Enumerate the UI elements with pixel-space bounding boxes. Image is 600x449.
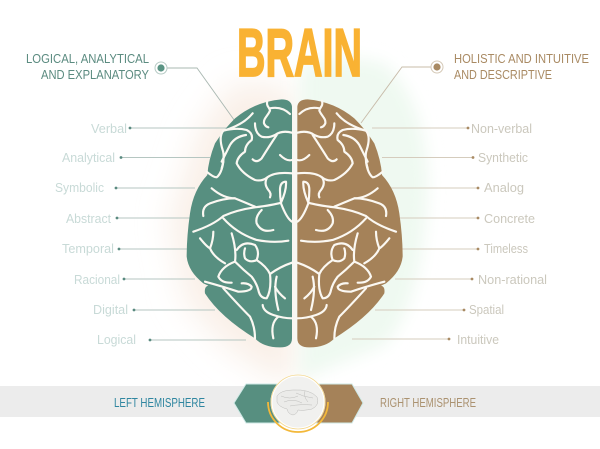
right attribute labels: Non-verbal — [471, 122, 532, 136]
bottom band — [0, 386, 600, 417]
watercolor background: right — [300, 58, 428, 380]
left attribute labels: Abstract — [66, 212, 112, 226]
right heading: AND DESCRIPTIVE — [454, 68, 552, 82]
left attribute labels: Verbal — [91, 122, 127, 136]
left attribute leader lines — [115, 127, 246, 341]
left heading — [26, 52, 150, 82]
right attribute leader lines — [352, 127, 479, 340]
right hemisphere — [297, 99, 403, 347]
icon: small brain — [277, 390, 318, 415]
left attribute labels: Analytical — [62, 151, 115, 165]
left heading: LOGICAL, ANALYTICAL — [26, 52, 149, 66]
watercolor background: left — [170, 82, 296, 385]
left attribute labels: Logical — [97, 333, 136, 347]
right heading connector — [361, 61, 443, 123]
left hemisphere label: LEFT HEMISPHERE — [114, 395, 205, 410]
brain — [187, 99, 403, 347]
left attribute labels: Temporal — [62, 242, 114, 256]
title: BRAIN — [237, 15, 362, 91]
right attribute labels: Timeless — [484, 242, 528, 256]
center badge — [268, 375, 328, 432]
right attribute labels: Concrete — [484, 212, 535, 226]
left attribute labels: Digital — [93, 303, 128, 317]
left attribute labels: Racional — [74, 273, 120, 287]
right attribute labels: Spatial — [469, 303, 504, 317]
left hexagon — [234, 384, 298, 423]
right hemisphere label: RIGHT HEMISPHERE — [380, 395, 476, 410]
left attribute labels — [55, 122, 136, 347]
left attribute labels: Symbolic — [55, 181, 104, 195]
left heading: AND EXPLANATORY — [41, 68, 150, 82]
left hemisphere — [187, 99, 292, 347]
right attribute labels: Intuitive — [457, 333, 499, 347]
right heading — [454, 52, 589, 82]
left heading connector — [155, 62, 237, 124]
right attribute labels — [457, 122, 547, 347]
right attribute labels: Synthetic — [478, 151, 528, 165]
right hexagon — [298, 384, 363, 423]
right attribute labels: Non-rational — [478, 273, 547, 287]
right attribute labels: Analog — [484, 181, 524, 195]
